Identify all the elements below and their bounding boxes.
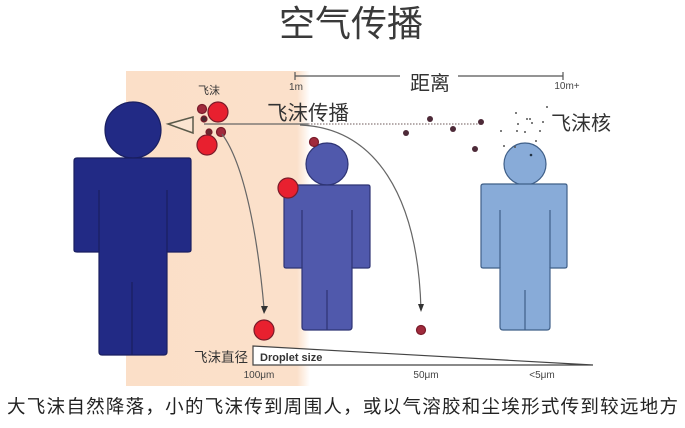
label: droplet diameter: 飞沫直径 [194, 350, 248, 365]
size labels: 100μm [244, 370, 274, 381]
arrowheads [261, 304, 424, 314]
large and medium landed droplets [254, 320, 426, 340]
figure: large dark person [74, 102, 191, 355]
distance scale: 10m+ [554, 81, 580, 92]
label: droplet transmission: 飞沫传播 [267, 102, 349, 125]
figure: far light-blue person [481, 143, 567, 330]
droplet size wedge [253, 346, 593, 365]
distance scale: 1m [289, 82, 303, 93]
small airborne droplets [403, 116, 484, 152]
size labels [244, 370, 555, 381]
droplet nuclei specks [500, 106, 548, 156]
size labels: 50μm [413, 370, 439, 381]
title: 空气传播 [279, 3, 423, 44]
caption: 大飞沫自然降落，小的飞沫传到周围人，或以气溶胶和尘埃形式传到较远地方 [7, 396, 678, 417]
droplet cluster [197, 102, 318, 198]
label: droplet nuclei: 飞沫核 [551, 112, 611, 135]
panel: near-range shaded zone [126, 71, 310, 386]
icon: mouth cone [168, 117, 193, 133]
figure: middle person [284, 143, 370, 330]
droplet size wedge: Droplet size [260, 352, 322, 364]
trajectory lines [204, 124, 480, 310]
distance scale: 距离 [410, 72, 450, 95]
size labels: <5μm [529, 370, 555, 381]
distance scale [289, 72, 580, 95]
label: droplets: 飞沫 [198, 84, 220, 97]
